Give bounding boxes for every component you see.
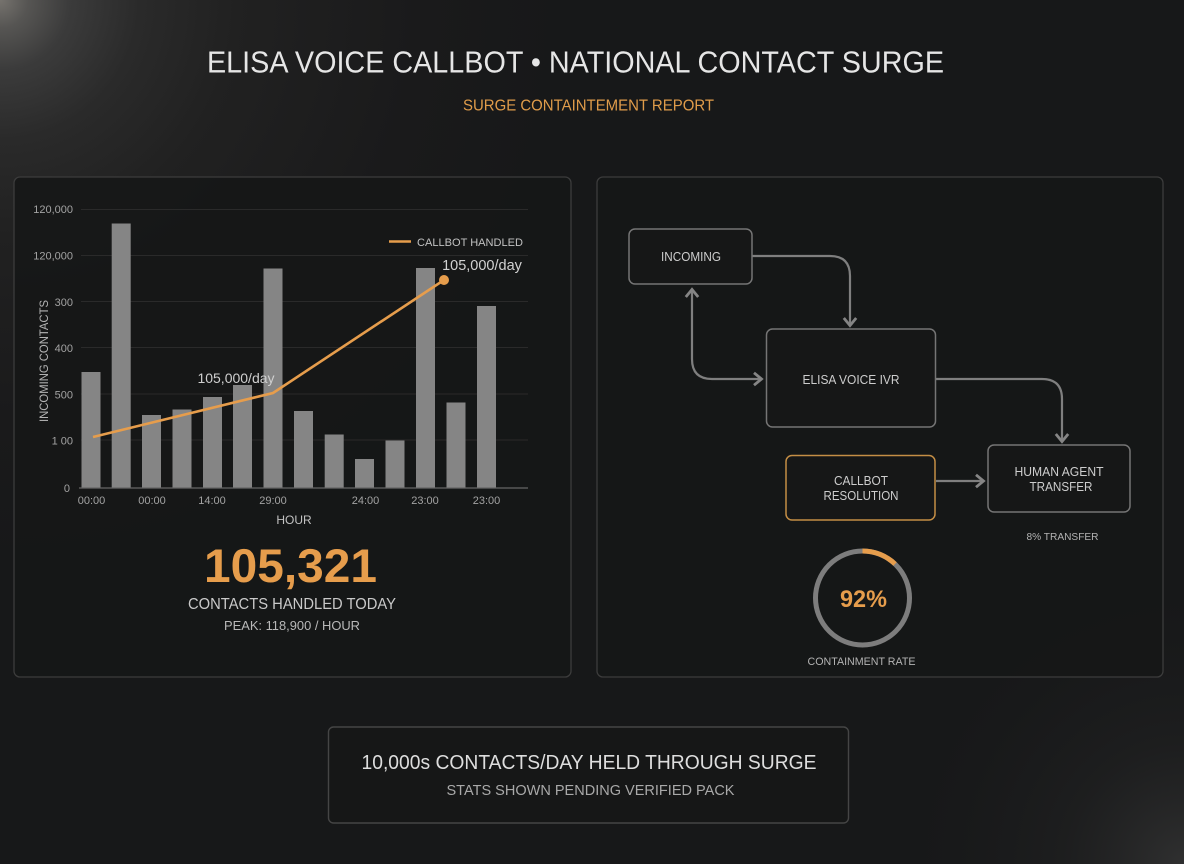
stat label: CONTACTS HANDLED TODAY xyxy=(188,596,396,613)
box: human agent transfer: HUMAN AGENT xyxy=(1014,465,1104,479)
bar chart xyxy=(79,210,528,488)
gauge: containment rate: 92% xyxy=(840,586,887,613)
title: ELISA VOICE CALLBOT • NATIONAL CONTACT SURGE xyxy=(207,44,944,80)
x axis title: HOUR xyxy=(276,513,312,527)
box: incoming xyxy=(629,229,752,284)
panel: call flow xyxy=(597,177,1163,677)
y axis labels: 0 xyxy=(64,483,70,495)
arrow: callbot to human agent xyxy=(936,480,984,482)
y axis labels: 1 00 xyxy=(52,436,73,448)
legend: CALLBOT HANDLED xyxy=(417,237,523,249)
box: callbot resolution: CALLBOT xyxy=(834,474,888,488)
gauge label: CONTAINMENT RATE xyxy=(808,656,916,668)
x axis labels: 00:00 xyxy=(138,495,166,507)
x axis labels: 14:00 xyxy=(198,495,226,507)
box: Elisa voice IVR xyxy=(766,329,936,427)
x axis labels: 29:00 xyxy=(259,495,287,507)
x axis labels xyxy=(78,495,500,507)
callout: surge summary xyxy=(328,727,848,823)
box: Elisa voice IVR: ELISA VOICE IVR xyxy=(802,373,900,387)
x axis labels: 00:00 xyxy=(78,495,105,507)
box: human agent transfer xyxy=(988,445,1130,512)
y axis labels: 120,000 xyxy=(33,204,73,216)
peak annotation: 105,000/day xyxy=(442,258,523,274)
arrow: IVR to human agent xyxy=(936,379,1062,442)
y axis labels: 120,000 xyxy=(33,250,73,262)
box: callbot resolution xyxy=(786,456,935,520)
panel: contacts chart xyxy=(14,177,571,677)
stat peak note: PEAK: 118,900 / HOUR xyxy=(224,619,360,633)
subtitle: SURGE CONTAINTEMENT REPORT xyxy=(463,98,714,114)
line series: callbot handled xyxy=(93,275,449,437)
box: incoming: INCOMING xyxy=(661,250,721,264)
mid-line annotation: 105,000/day xyxy=(197,370,275,386)
gauge: containment rate xyxy=(816,551,910,645)
y axis title: INCOMING CONTACTS xyxy=(39,300,51,422)
x axis labels: 23:00 xyxy=(411,495,439,507)
box: human agent transfer: TRANSFER xyxy=(1030,480,1092,494)
callout: surge summary: STATS SHOWN PENDING VERIFIED PACK xyxy=(446,783,735,799)
x axis labels: 24:00 xyxy=(352,495,379,507)
big stat: 105,321 xyxy=(204,539,377,592)
x axis labels: 23:00 xyxy=(473,495,500,507)
y axis labels: 500 xyxy=(55,390,73,402)
callout: surge summary: 10,000s CONTACTS/DAY HELD THROUGH SURGE xyxy=(362,752,816,774)
arrow: IVR and incoming two-way xyxy=(692,289,762,379)
arrow: incoming to IVR xyxy=(752,256,850,326)
box: callbot resolution: RESOLUTION xyxy=(824,489,898,503)
transfer note: 8% TRANSFER xyxy=(1026,531,1099,543)
y axis labels: 400 xyxy=(55,343,73,355)
y axis labels: 300 xyxy=(55,297,73,309)
y axis labels xyxy=(33,204,73,495)
